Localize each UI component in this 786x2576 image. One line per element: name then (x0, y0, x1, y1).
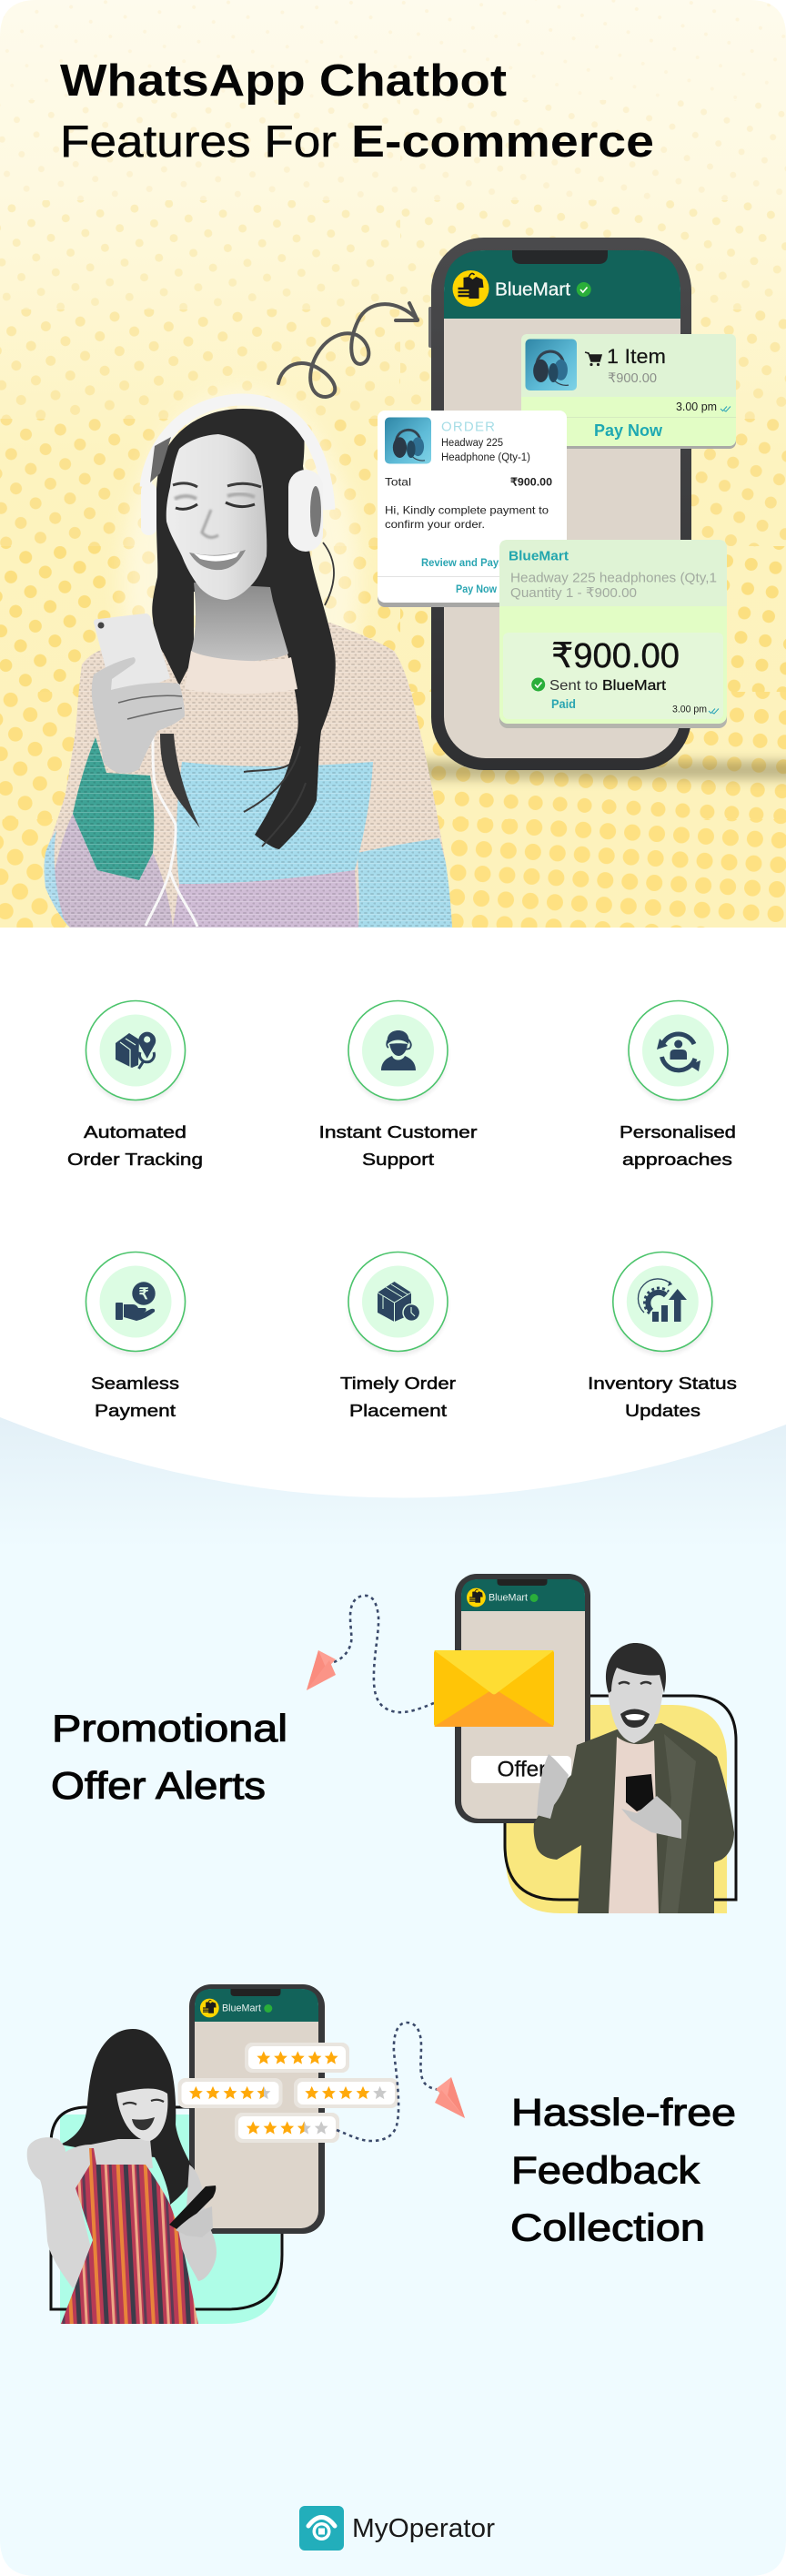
raised arm and chest (27, 2137, 153, 2288)
label: Updates (625, 1401, 700, 1420)
offers button: Offers (497, 1757, 557, 1782)
icon: gear and rising bars (638, 1279, 687, 1322)
label: Payment (95, 1401, 176, 1420)
hand (92, 657, 185, 774)
face (116, 2089, 167, 2141)
card: 1 item pay now: ₹900.00 (608, 371, 657, 386)
phone held (94, 614, 170, 701)
black outline frame (505, 1696, 736, 1900)
card: order summary: ₹900.00 (510, 475, 552, 488)
hero phone (428, 238, 691, 770)
feature: inventory status updates (588, 1253, 737, 1420)
sweater collar (185, 651, 297, 694)
hero panel (0, 0, 786, 928)
label (340, 1374, 456, 1420)
card: 1 item pay now: Pay Now (594, 421, 663, 440)
feature: timely order placement (340, 1253, 456, 1420)
heading: Hassle-free (511, 2091, 736, 2134)
card: payment receipt: BlueMart (509, 548, 569, 564)
card: payment receipt: 3.00 pm (672, 705, 707, 715)
title: E-commerce (351, 117, 654, 167)
head (608, 1646, 664, 1743)
raised hand (537, 1754, 569, 1819)
woman with headphones and phone (44, 391, 452, 928)
rating card: four and a half stars (178, 2078, 282, 2108)
icon: hand with rupee coin: ₹ (139, 1285, 149, 1303)
hair wisps (244, 746, 306, 847)
phone: BlueMart (489, 1593, 528, 1604)
logo mark (299, 2506, 344, 2551)
label (67, 1122, 203, 1169)
heading (51, 1707, 287, 1807)
title: WhatsApp Chatbot (60, 56, 507, 106)
lilac stripe (173, 870, 358, 928)
hand (176, 2206, 213, 2237)
neck (191, 583, 288, 662)
shirt (609, 1737, 659, 1913)
wordmark: MyOperator (352, 2514, 495, 2543)
phone held (626, 1774, 654, 1811)
phone (455, 1574, 590, 1823)
label (588, 1374, 737, 1420)
phone (189, 1984, 325, 2234)
dress (61, 2148, 198, 2324)
facial features (173, 483, 261, 570)
card: 1 item pay now (521, 334, 736, 449)
label (620, 1122, 736, 1169)
lower sleeve lilac (51, 814, 173, 928)
card: payment receipt: Quantity 1 - ₹900.00 (510, 585, 637, 601)
card: 1 item pay now: 3.00 pm (676, 401, 717, 413)
card: order summary: Headphone (Qty-1) (441, 452, 530, 463)
sweater (44, 623, 452, 928)
blue stripe (176, 762, 373, 884)
paper plane (435, 2077, 465, 2118)
brand name: BlueMart (495, 280, 570, 300)
label: Order Tracking (67, 1150, 203, 1169)
feature: seamless payment (86, 1253, 186, 1420)
phone held (169, 2186, 216, 2230)
brand logo (453, 270, 489, 307)
arrow: squiggle pointing to phone (278, 303, 418, 397)
footer logo: MyOperator (299, 2506, 495, 2551)
jacket (534, 1723, 734, 1913)
label: Inventory Status (588, 1374, 737, 1393)
hand on phone (621, 1796, 681, 1839)
woman celebrating (27, 2029, 217, 2324)
heading: Promotional (52, 1707, 287, 1749)
black outline frame (51, 2107, 282, 2309)
card: order summary: Pay Now (456, 583, 498, 595)
card: order summary: Hi, Kindly complete payment to (385, 504, 549, 517)
rating card: four stars (294, 2078, 398, 2108)
rating card: five stars (245, 2043, 349, 2073)
icon: hand with rupee coin (116, 1282, 156, 1321)
label: Automated (84, 1122, 186, 1141)
heading: Feedback (511, 2148, 700, 2192)
label: Placement (349, 1401, 447, 1420)
hair back (152, 409, 336, 849)
earphone cable (146, 734, 197, 927)
hair (60, 2029, 196, 2205)
label (91, 1374, 179, 1420)
card: payment receipt: Headway 225 headphones (Qty,1 (510, 570, 717, 586)
label: Seamless (91, 1374, 179, 1393)
label: Personalised (620, 1122, 736, 1141)
title (60, 56, 654, 167)
jacket highlight (660, 1734, 696, 1913)
heading: Collection (510, 2206, 705, 2248)
section: promotional offer alerts (51, 1574, 736, 1913)
label: approaches (622, 1150, 732, 1169)
card: payment receipt: BlueMart (602, 678, 667, 694)
card: order summary: Review and Payment (421, 556, 523, 569)
card: payment receipt: ₹900.00 (551, 637, 680, 675)
verified badge (577, 282, 591, 297)
feature: automated order tracking (67, 1001, 203, 1169)
card: 1 item pay now: 1 Item (607, 345, 666, 368)
heading (510, 2091, 736, 2248)
hair lock under the hand (160, 734, 200, 828)
cart icon (585, 352, 601, 366)
heading: Offer Alerts (51, 1764, 266, 1807)
title: Features For (60, 117, 337, 167)
card: order summary: confirm your order. (385, 518, 485, 531)
dashed flight path (337, 2023, 440, 2141)
phone: BlueMart (222, 2003, 261, 2013)
label: Instant Customer (318, 1122, 477, 1141)
label: Timely Order (340, 1374, 456, 1393)
features panel (0, 928, 786, 1498)
offers button (471, 1756, 571, 1783)
dot pattern background (0, 0, 786, 928)
lower section background (0, 1402, 786, 2576)
label (318, 1122, 477, 1169)
card: payment receipt (499, 540, 727, 728)
soft halo (123, 391, 359, 774)
card: order summary: Headway 225 (441, 438, 503, 449)
card: payment receipt: Paid (551, 696, 576, 711)
sleeve blue (358, 838, 452, 928)
card: payment receipt: Sent to (549, 678, 598, 694)
icon: parcel with location pin (116, 1032, 156, 1069)
face (166, 434, 267, 600)
rating card: three and a half stars (235, 2113, 339, 2143)
icon: box with clock (378, 1282, 420, 1322)
label: Support (362, 1150, 434, 1169)
dashed flight path (331, 1596, 434, 1712)
man with phone (534, 1643, 734, 1913)
knit texture (44, 623, 452, 928)
icon: person in refresh ring (657, 1034, 700, 1071)
section: hassle-free feedback collection (27, 1984, 736, 2324)
mint backdrop (60, 2115, 280, 2324)
paper plane (307, 1650, 336, 1690)
yellow backdrop (506, 1705, 727, 1913)
card: order summary: ORDER (441, 419, 495, 435)
teal cuff (73, 737, 154, 880)
feature: personalised approaches (620, 1001, 736, 1169)
card: order summary: Total (385, 475, 411, 488)
feature: instant customer support (318, 1001, 477, 1169)
icon: support agent (381, 1030, 416, 1070)
headphones (141, 400, 334, 605)
phone shadow (409, 761, 786, 779)
card: order summary (378, 411, 567, 607)
envelope (434, 1650, 554, 1727)
right arm (177, 2165, 217, 2281)
